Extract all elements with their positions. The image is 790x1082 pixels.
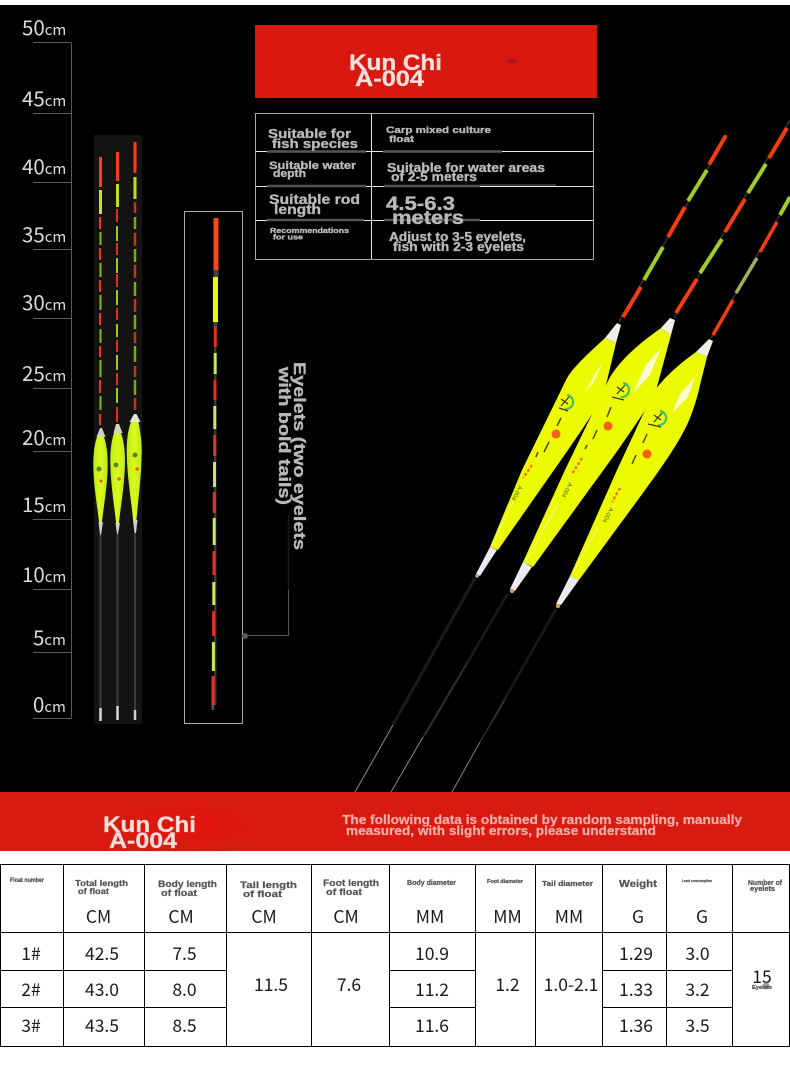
- table header labels: eyelets: [750, 886, 775, 893]
- table values: 3.5: [685, 1013, 710, 1038]
- table header labels: [10, 878, 783, 929]
- table values: Eyelets: [752, 985, 772, 991]
- table values: 3.2: [685, 977, 710, 1002]
- table values: 1.33: [619, 977, 653, 1002]
- table values: 1.0-2.1: [544, 972, 598, 997]
- height ruler: 45cm: [22, 82, 66, 112]
- spec table: meters: [392, 208, 464, 229]
- table values: 1.29: [619, 941, 653, 966]
- table values: 7.5: [172, 941, 197, 966]
- table values: 10.9: [415, 941, 449, 966]
- table header labels: Body diameter: [407, 880, 456, 887]
- top title banner: Kun Chi: [349, 50, 442, 75]
- table values: 3#: [21, 1013, 41, 1038]
- table header labels: of float: [326, 887, 363, 898]
- height ruler: 20cm: [22, 421, 66, 451]
- data table: [0, 864, 790, 1047]
- table values: 2#: [21, 977, 41, 1002]
- height ruler: 15cm: [22, 488, 66, 518]
- spec table: 4.5-6.3: [386, 194, 455, 215]
- height ruler: [22, 11, 72, 718]
- table header labels: G: [632, 904, 644, 929]
- height ruler: 25cm: [22, 357, 66, 387]
- spec table: [256, 114, 594, 260]
- spec table: Recommendations: [270, 226, 349, 235]
- table header labels: G: [696, 904, 708, 929]
- height ruler: 40cm: [22, 150, 66, 180]
- table values: 8.0: [172, 977, 197, 1002]
- table header labels: Foot diameter: [487, 879, 524, 885]
- table header labels: CM: [86, 904, 111, 929]
- table header labels: of float: [78, 886, 109, 896]
- top title banner: A-004: [355, 66, 425, 91]
- float 1: [93, 157, 108, 721]
- spec table: Suitable for: [268, 126, 351, 141]
- bottom red banner: measured, with slight errors, please understand: [346, 823, 656, 838]
- float 2: [110, 152, 125, 720]
- bottom red banner: Kun Chi: [103, 812, 196, 837]
- table values: 1.2: [495, 972, 520, 997]
- table values: 11.6: [415, 1013, 449, 1038]
- height ruler: 50cm: [22, 11, 66, 41]
- table header labels: MM: [493, 904, 522, 929]
- table values: 11.5: [254, 972, 288, 997]
- height ruler: 0cm: [33, 688, 66, 718]
- spec table: length: [274, 201, 321, 217]
- table header labels: Tail diameter: [542, 879, 593, 888]
- table header labels: MM: [555, 904, 583, 929]
- table values: 43.0: [85, 977, 119, 1002]
- spec table: depth: [273, 168, 306, 180]
- spec table: fish species: [272, 136, 358, 151]
- table header labels: MM: [416, 904, 444, 929]
- table header labels: Foot length: [323, 878, 379, 889]
- spec table: Carp mixed culture: [386, 125, 491, 136]
- table values: 3.0: [685, 941, 710, 966]
- table header labels: Tail length: [240, 880, 297, 891]
- float 3: [127, 142, 142, 720]
- table header labels: of float: [161, 888, 198, 899]
- table values: 7.6: [337, 972, 361, 997]
- panel: three upright floats: [93, 135, 142, 724]
- table header labels: CM: [168, 904, 194, 929]
- table values: [21, 941, 772, 1038]
- table header labels: Number of: [748, 880, 783, 887]
- float A: [355, 135, 727, 792]
- height ruler: 35cm: [22, 218, 66, 248]
- height ruler: 30cm: [22, 286, 66, 316]
- panel: tail close-up: [184, 212, 242, 724]
- table values: 43.5: [85, 1013, 119, 1038]
- table header labels: Lead consumption: [682, 878, 712, 883]
- height ruler: 5cm: [33, 621, 66, 651]
- table values: 1#: [21, 941, 41, 966]
- spec table: of 2-5 meters: [391, 170, 477, 184]
- spec table: Suitable rod: [269, 191, 360, 207]
- float C: A-004: [600, 506, 614, 524]
- float B: [391, 120, 790, 792]
- callout: eyelets note: [242, 362, 309, 639]
- table values: 8.5: [172, 1013, 197, 1038]
- callout: eyelets note: Eyelets (two eyelets: [290, 362, 309, 550]
- spec table: fish with 2-3 eyelets: [393, 240, 524, 254]
- table header labels: CM: [251, 904, 277, 929]
- table values: 1.36: [619, 1013, 653, 1038]
- table values: 11.2: [415, 977, 449, 1002]
- top title banner: [255, 25, 597, 98]
- black product background: [0, 5, 790, 792]
- table header labels: of float: [243, 889, 283, 900]
- table header labels: Float number: [10, 878, 45, 884]
- table values: 15: [752, 964, 772, 989]
- spec table: Suitable water: [269, 160, 357, 172]
- table header labels: Weight: [619, 879, 658, 890]
- float C: [452, 197, 790, 792]
- callout: eyelets note: with bold tails): [275, 366, 294, 505]
- float A: A-004: [509, 484, 523, 502]
- float B: A-004: [559, 481, 573, 499]
- bottom red banner: [0, 792, 790, 855]
- table header labels: Body length: [158, 879, 217, 890]
- height ruler: 10cm: [22, 558, 66, 588]
- panel: diagonal float close-up: [355, 120, 790, 792]
- table header labels: Total length: [75, 878, 128, 888]
- bottom red banner: A-004: [109, 828, 178, 853]
- spec table: float: [389, 134, 415, 145]
- spec table: for use: [273, 232, 303, 242]
- spec table: Suitable for water areas: [387, 161, 545, 175]
- table header labels: CM: [333, 904, 359, 929]
- spec table: Adjust to 3-5 eyelets,: [389, 230, 526, 244]
- table values: 42.5: [85, 941, 119, 966]
- bottom red banner: The following data is obtained by random sampling, manually: [342, 812, 743, 827]
